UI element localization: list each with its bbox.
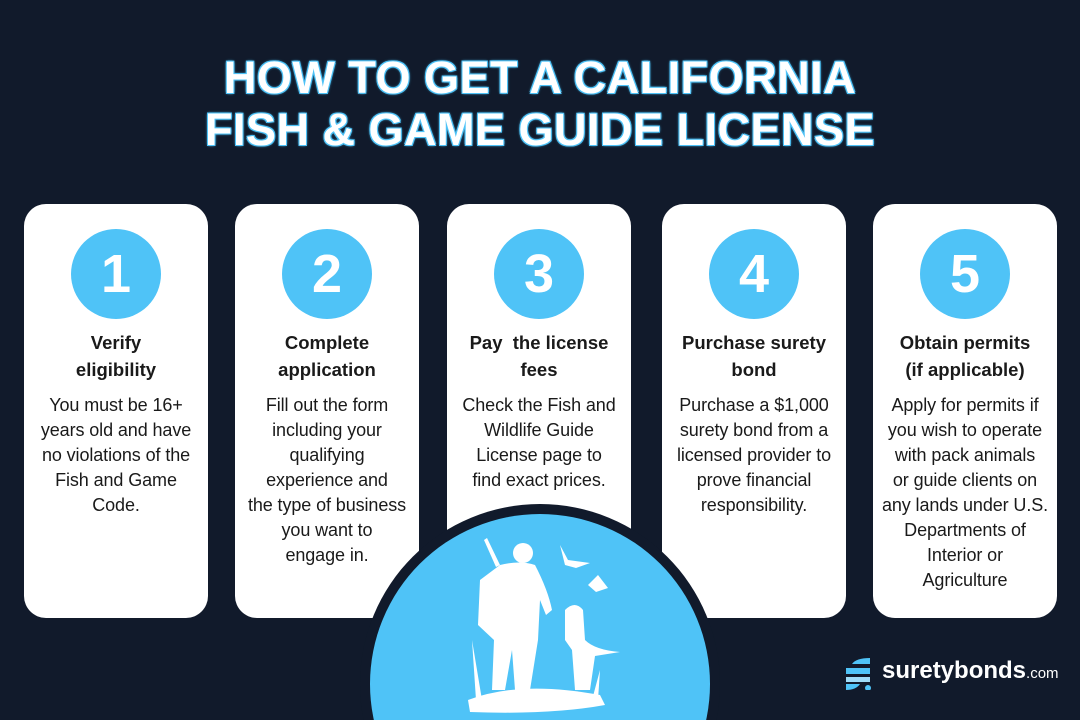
heading 4: Purchase surety (682, 332, 826, 353)
heading 1: eligibility (76, 359, 156, 380)
text 4: surety bond from a (680, 420, 828, 440)
text 2: including your (272, 420, 382, 440)
text 5: Interior or (927, 545, 1003, 565)
text 4: Purchase a $1,000 (679, 395, 829, 415)
text 3: Wildlife Guide (484, 420, 594, 440)
logo icon (846, 658, 871, 690)
card 5 (873, 204, 1057, 618)
number 5 (920, 229, 1010, 319)
text 3: License page to (476, 445, 602, 465)
title: FISH & GAME GUIDE LICENSE (205, 104, 875, 155)
heading 5: (if applicable) (905, 359, 1025, 380)
text 1: Code. (92, 495, 140, 515)
card 1 (24, 204, 208, 618)
card 2 (235, 204, 419, 618)
title: HOW TO GET A CALIFORNIA (224, 52, 856, 103)
text 4: responsibility. (701, 495, 807, 515)
text 5: or guide clients on (893, 470, 1037, 490)
text 5: Agriculture (923, 570, 1007, 590)
number 1 (71, 229, 161, 319)
logo text: suretybonds.com (882, 657, 1059, 684)
text 3 (462, 395, 616, 490)
text 4 (677, 395, 831, 515)
number 2: 2 (312, 244, 342, 304)
heading 1: Verify (91, 332, 141, 353)
text 5: Apply for permits if (891, 395, 1039, 415)
text 2: experience and (266, 470, 388, 490)
text 2: Fill out the form (266, 395, 388, 415)
heading 2: application (278, 359, 376, 380)
heading 4 (682, 332, 826, 380)
text 1: no violations of the (42, 445, 190, 465)
heading 2 (278, 332, 376, 380)
text 2 (248, 395, 406, 565)
text 5 (882, 395, 1048, 590)
heading 3 (470, 332, 608, 380)
heading 3: Pay the license (470, 332, 608, 353)
number 3: 3 (524, 244, 554, 304)
text 1: Fish and Game (55, 470, 177, 490)
text 4: licensed provider to (677, 445, 831, 465)
heading 4: bond (731, 359, 777, 380)
number 2 (282, 229, 372, 319)
text 5: any lands under U.S. (882, 495, 1048, 515)
text 5: with pack animals (895, 445, 1035, 465)
logo (846, 657, 1059, 690)
text 3: find exact prices. (472, 470, 606, 490)
number 4: 4 (739, 244, 769, 304)
text 2: the type of business (248, 495, 406, 515)
card 3 (447, 204, 631, 618)
heading 5 (900, 332, 1030, 380)
title (205, 52, 876, 155)
number 1: 1 (101, 244, 131, 304)
text 5: you wish to operate (888, 420, 1042, 440)
text 5: Departments of (904, 520, 1026, 540)
heading 3: fees (520, 359, 558, 380)
text 2: engage in. (285, 545, 369, 565)
heading 1 (76, 332, 156, 380)
number 5: 5 (950, 244, 980, 304)
heading 5: Obtain permits (900, 332, 1030, 353)
text 2: you want to (282, 520, 372, 540)
text 4: prove financial (697, 470, 811, 490)
card 4 (662, 204, 846, 618)
heading 2: Complete (285, 332, 369, 353)
number 4 (709, 229, 799, 319)
text 1 (41, 395, 191, 515)
text 2: qualifying (289, 445, 365, 465)
text 1: years old and have (41, 420, 191, 440)
number 3 (494, 229, 584, 319)
text 3: Check the Fish and (462, 395, 616, 415)
text 1: You must be 16+ (49, 395, 183, 415)
